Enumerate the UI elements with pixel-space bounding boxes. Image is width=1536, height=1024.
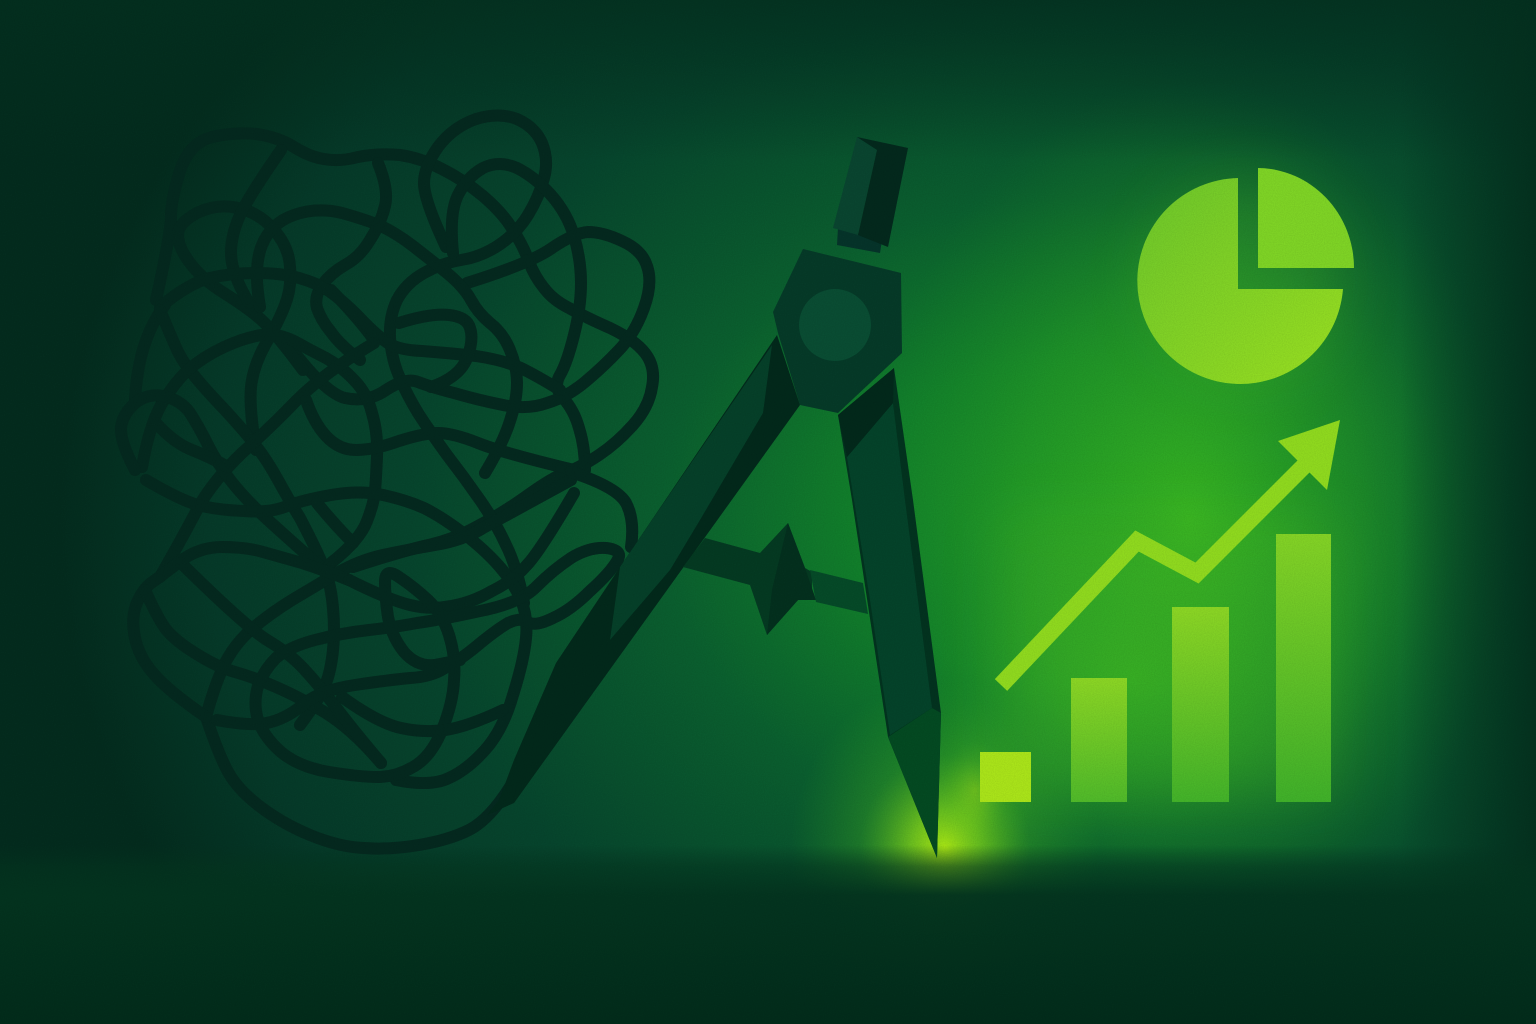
compass crossbar with arrow joint [683, 523, 868, 635]
bar 4 [1276, 534, 1331, 802]
rising trend arrow [1001, 420, 1340, 685]
tangled scribble [121, 116, 653, 849]
glow behind charts [1000, 180, 1345, 800]
bar chart [980, 534, 1331, 802]
compass hinge head [773, 249, 902, 413]
bar 2 [1071, 678, 1127, 802]
compass pivot disc [799, 289, 871, 361]
compass left arm [487, 335, 800, 815]
bar 3 [1172, 607, 1229, 802]
compass [487, 137, 941, 858]
pie detached slice [1258, 168, 1354, 268]
pie chart icon [1137, 168, 1354, 384]
compass right arm with pointed tip [838, 368, 941, 858]
bar 1 [980, 752, 1031, 802]
pie main segment [1137, 178, 1343, 384]
compass top handle [833, 137, 908, 253]
